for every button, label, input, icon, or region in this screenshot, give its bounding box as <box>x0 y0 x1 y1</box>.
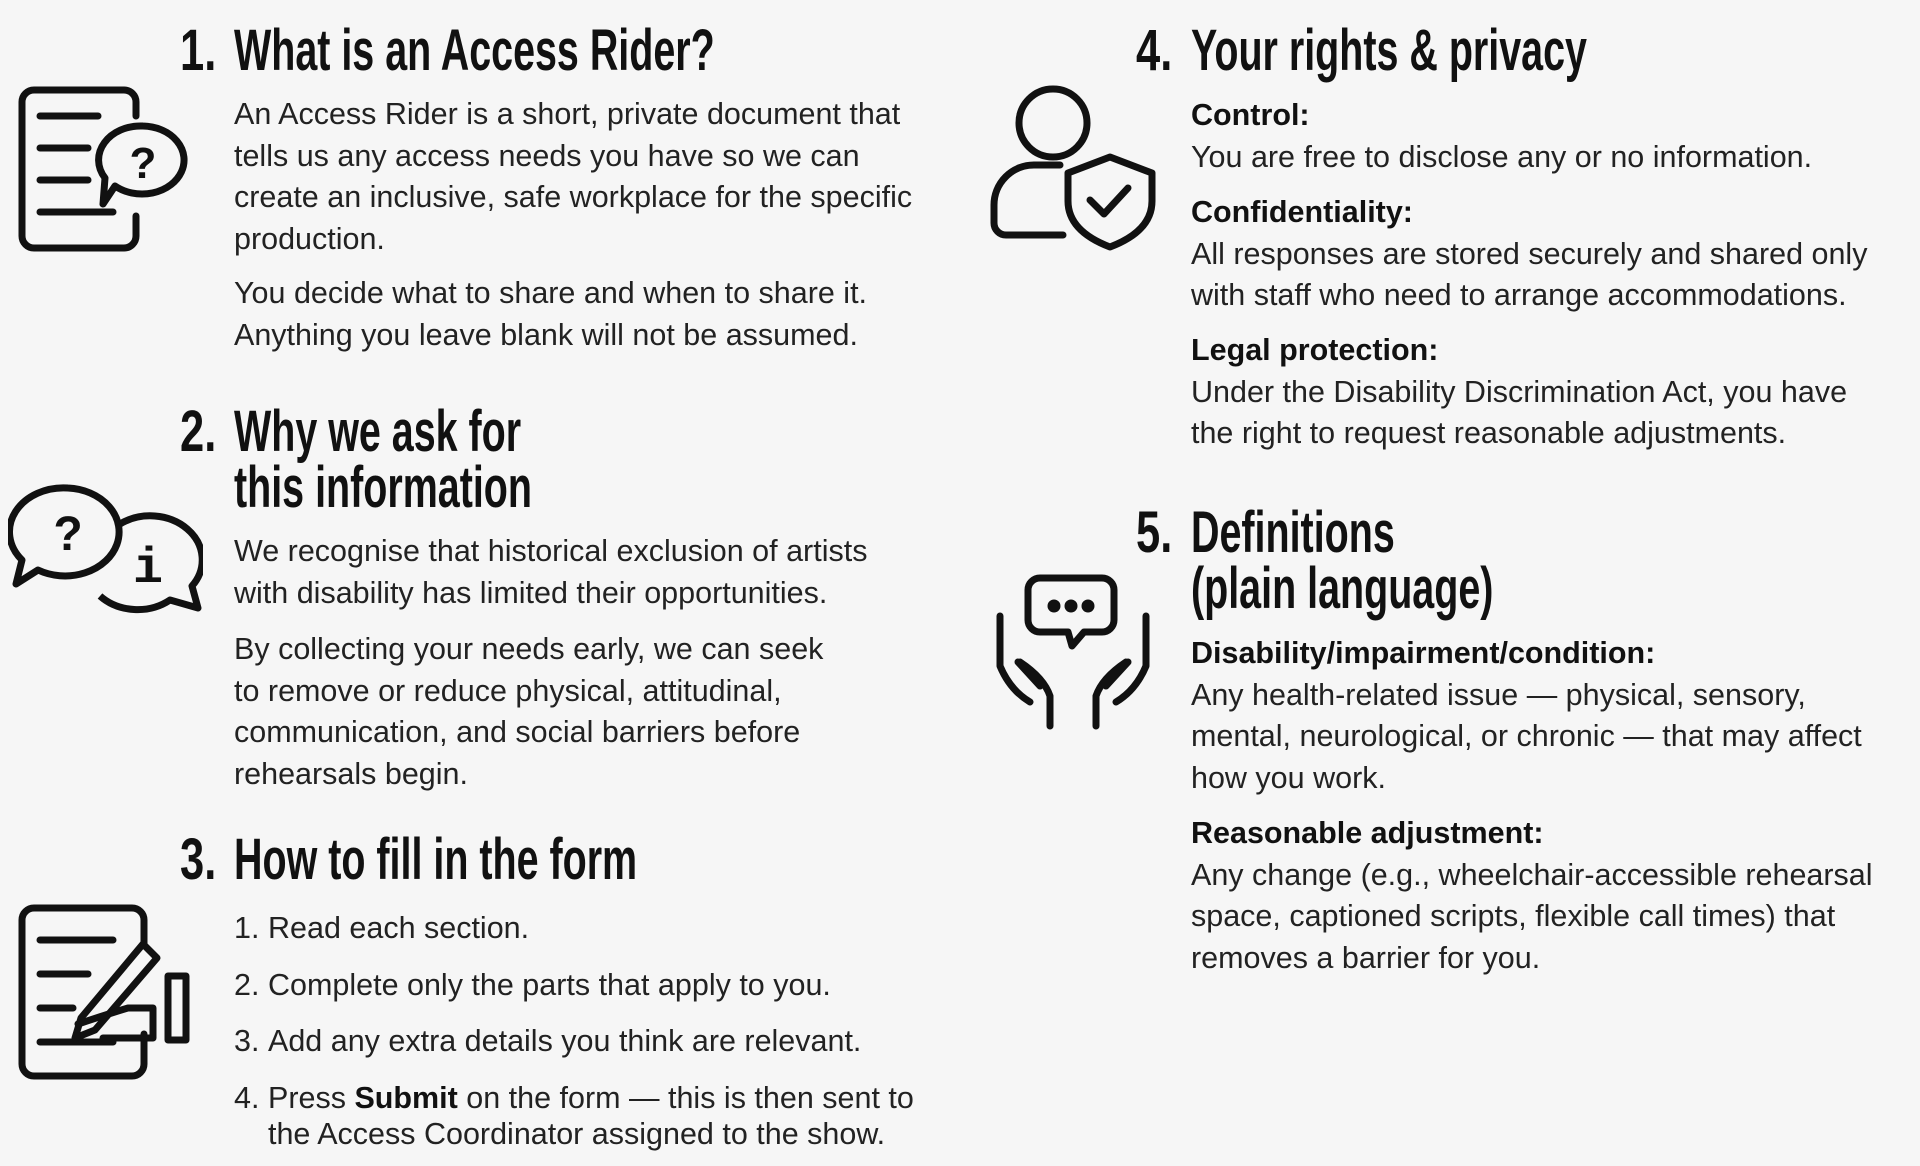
section 2 heading <box>234 399 532 520</box>
section 3 list continuation: the Access Coordinator assigned to the show. <box>268 1117 885 1151</box>
legal protection: the right to request reasonable adjustments. <box>1191 416 1786 450</box>
rights text <box>1191 98 1812 174</box>
definition 1: how you work. <box>1191 760 1386 794</box>
definition 1: Disability/impairment/condition: <box>1191 636 1655 670</box>
section 2 text 2: to remove or reduce physical, attitudinal, <box>234 674 782 708</box>
definition 1: Any health-related issue — physical, sensory, <box>1191 678 1806 712</box>
section 4 number: 4. <box>1136 18 1172 83</box>
rights text: Control: <box>1191 98 1310 132</box>
section 2 text 2: By collecting your needs early, we can seek <box>234 632 823 666</box>
section 5 number: 5. <box>1136 500 1172 565</box>
section 3 list <box>268 911 914 1114</box>
section 3 list numbers: 2. <box>234 968 259 1002</box>
icon: question and info bubbles: ? <box>53 508 83 561</box>
section 3 number: 3. <box>180 827 216 892</box>
section 3 list numbers: 4. <box>234 1080 259 1114</box>
section 1 text: An Access Rider is a short, private document that <box>234 97 900 131</box>
definition 2: Reasonable adjustment: <box>1191 816 1544 850</box>
section 2 heading: this information <box>234 455 532 520</box>
definition 1 <box>1191 636 1862 794</box>
legal protection <box>1191 333 1847 450</box>
section 5 heading <box>1191 500 1493 621</box>
confidentiality: Confidentiality: <box>1191 195 1413 229</box>
section 2 text 2: communication, and social barriers before <box>234 715 800 749</box>
section 1 text 2: Anything you leave blank will not be assumed. <box>234 318 858 352</box>
section 3 list: Press Submit on the form — this is then sent to <box>268 1080 914 1114</box>
section 2 text: with disability has limited their opportunities. <box>234 576 827 610</box>
icon: question and info bubbles: i <box>133 541 163 598</box>
icon: form with pen and hand <box>18 904 190 1080</box>
icon: person with shield <box>990 86 1156 250</box>
definition 1: mental, neurological, or chronic — that may affect <box>1191 719 1862 753</box>
section 2 number: 2. <box>180 399 216 464</box>
legal protection: Legal protection: <box>1191 333 1438 367</box>
section 3 list: Add any extra details you think are relevant. <box>268 1024 861 1058</box>
section 2 text: We recognise that historical exclusion of artists <box>234 534 867 568</box>
section 1 number: 1. <box>180 18 216 83</box>
legal protection: Under the Disability Discrimination Act, you have <box>1191 374 1847 408</box>
section 3 list: Complete only the parts that apply to you. <box>268 968 831 1002</box>
section 5 heading: Definitions <box>1191 500 1395 565</box>
section 1 text: create an inclusive, safe workplace for the specific <box>234 180 912 214</box>
section 1 text <box>234 97 912 256</box>
section 1 text: tells us any access needs you have so we can <box>234 138 860 172</box>
confidentiality: All responses are stored securely and shared only <box>1191 236 1867 270</box>
section 1 text 2: You decide what to share and when to share it. <box>234 276 867 310</box>
definition 2: removes a barrier for you. <box>1191 940 1540 974</box>
definition 2: Any change (e.g., wheelchair-accessible rehearsal <box>1191 858 1873 892</box>
section 3 list numbers <box>234 911 259 1114</box>
section 3 list numbers: 1. <box>234 911 259 945</box>
section 2 text 2: rehearsals begin. <box>234 756 468 790</box>
section 4 heading: Your rights & privacy <box>1191 18 1587 83</box>
section 1 text: production. <box>234 222 385 256</box>
section 5 heading: (plain language) <box>1191 556 1493 621</box>
confidentiality: with staff who need to arrange accommodations. <box>1191 278 1847 312</box>
icon: question and info bubbles <box>8 484 203 614</box>
section 2 text <box>234 534 867 610</box>
section 3 list: Read each section. <box>268 911 529 945</box>
section 3 heading: How to fill in the form <box>234 827 637 892</box>
section 3 list numbers: 3. <box>234 1024 259 1058</box>
icon: hands with speech bubble <box>996 574 1150 730</box>
definition 2: space, captioned scripts, flexible call times) that <box>1191 899 1835 933</box>
icon: document with question bubble <box>18 86 188 252</box>
icon: document with question bubble: ? <box>130 139 156 188</box>
section 1 text 2 <box>234 276 867 352</box>
section 2 heading: Why we ask for <box>234 399 521 464</box>
rights text: You are free to disclose any or no information. <box>1191 140 1812 174</box>
confidentiality <box>1191 195 1868 312</box>
section 1 heading: What is an Access Rider? <box>234 18 715 83</box>
definition 2 <box>1191 816 1873 974</box>
section 2 text 2 <box>234 632 824 790</box>
